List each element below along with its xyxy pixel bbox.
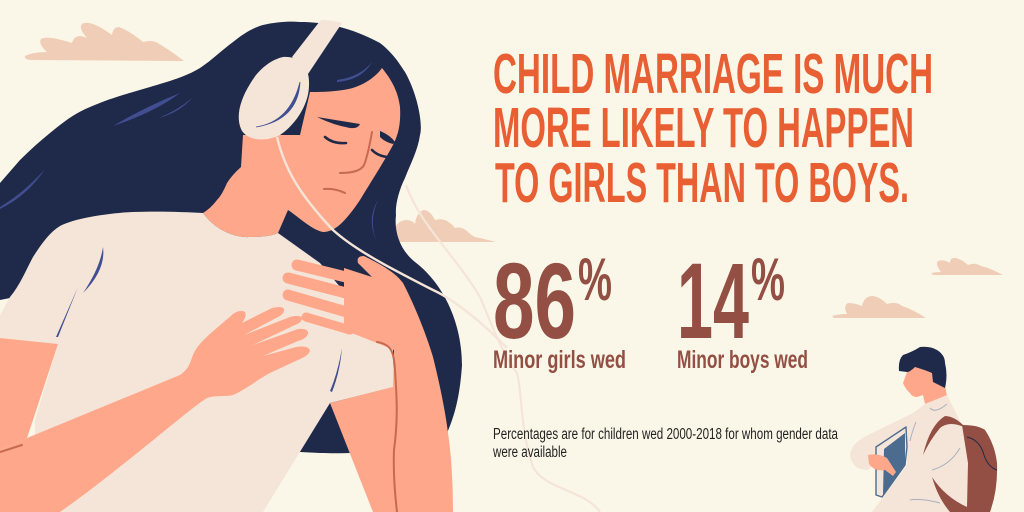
left upper arm [0, 338, 58, 450]
stat: boys: % [751, 246, 785, 313]
shirt [0, 212, 394, 512]
backpack [932, 425, 997, 512]
arm crease lines [0, 342, 397, 512]
footnote [492, 426, 838, 461]
headline [493, 42, 933, 215]
stat: girls: Minor girls wed [493, 346, 626, 374]
cloud top left [25, 23, 184, 61]
backpack strap [923, 416, 968, 512]
book [876, 427, 907, 497]
cloud behind hair [395, 210, 496, 242]
hand on book [868, 454, 896, 476]
stat: boys: Minor boys wed [677, 346, 808, 374]
hair [899, 347, 946, 388]
cloud right large [832, 296, 926, 318]
boy with book illustration [850, 347, 997, 512]
eyes [325, 137, 387, 157]
nose and mouth [324, 132, 372, 193]
eyebrows [317, 117, 395, 144]
book cover [883, 433, 905, 495]
headphone wire [277, 137, 507, 348]
stat: girls: 86 [493, 240, 576, 361]
footnote: were available [492, 444, 567, 461]
hair [0, 22, 462, 453]
stat: girls: % [578, 246, 612, 313]
distant earphone wire [406, 185, 600, 512]
cloud right small [931, 258, 1003, 275]
woman illustration [0, 20, 507, 512]
face features [317, 117, 395, 193]
stat: boys: 14 [677, 240, 749, 361]
neck and face [903, 365, 947, 404]
forearm and chest hand [0, 307, 310, 512]
shirt fold lines [56, 247, 342, 392]
shirt folds [910, 404, 960, 503]
headphones [239, 20, 342, 139]
backpack seam [967, 437, 997, 470]
upper arm and shoulder hand [288, 256, 453, 512]
headphone highlight [256, 82, 300, 127]
neck and face [203, 68, 400, 237]
torso and arm [850, 395, 968, 512]
footnote: Percentages are for children wed 2000-2018 for whom gender data [493, 426, 838, 443]
hair highlights [0, 62, 378, 242]
